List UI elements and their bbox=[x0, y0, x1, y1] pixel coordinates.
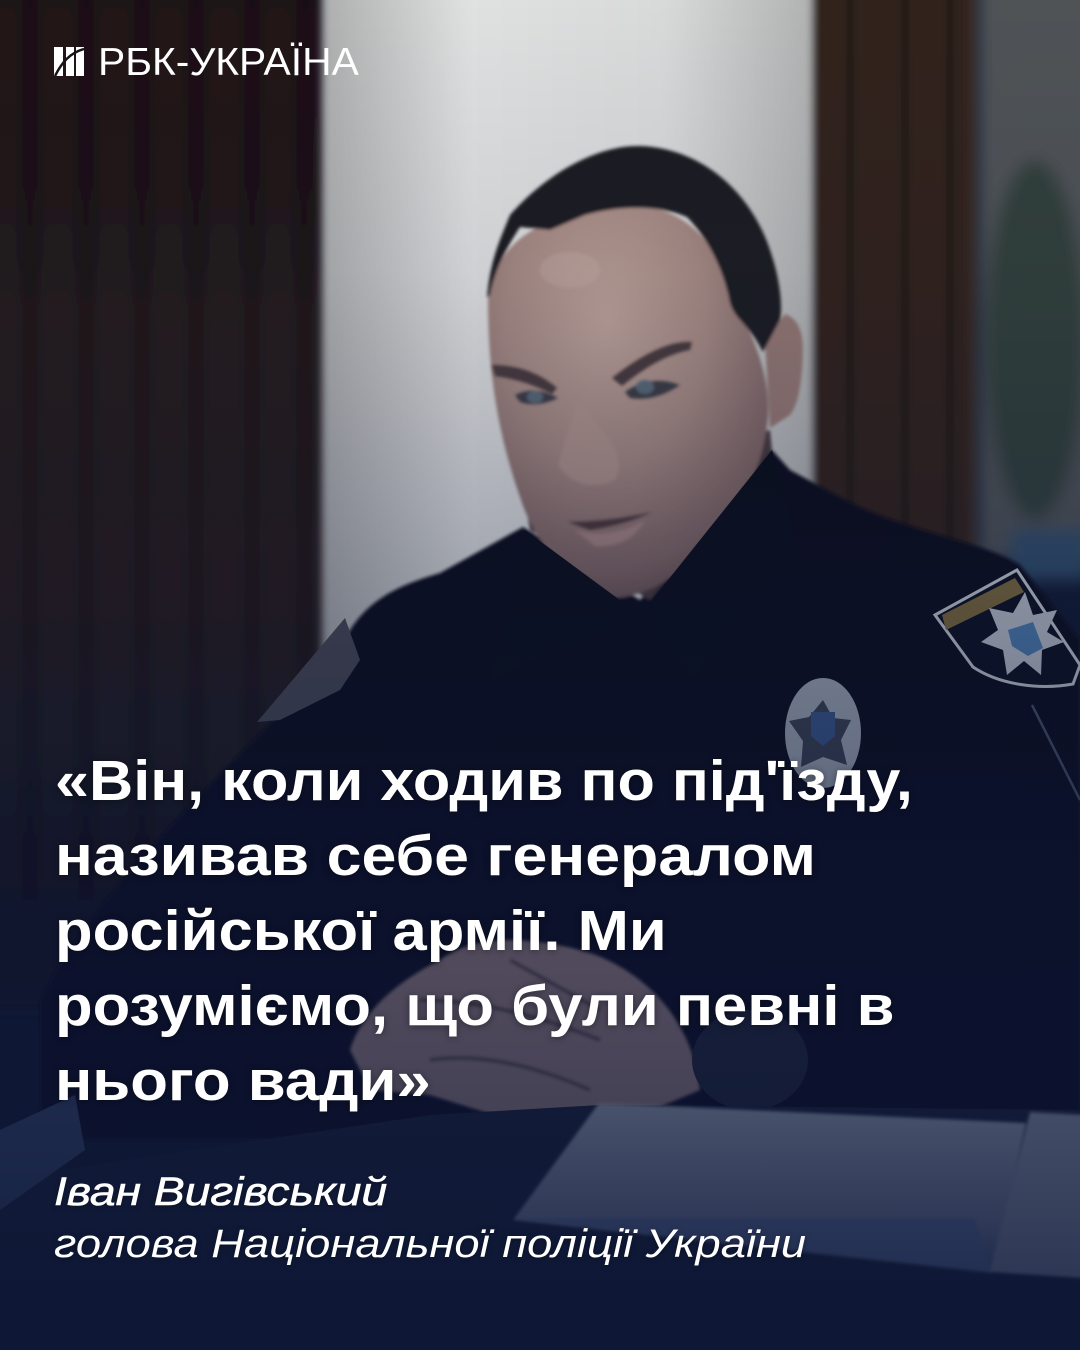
papers bbox=[513, 1103, 1080, 1278]
ear bbox=[765, 314, 803, 428]
neck shadow bbox=[525, 430, 772, 600]
quote text: «Він, коли ходив по під'їзду, bbox=[55, 749, 913, 812]
quote text: розуміємо, що були певні в bbox=[55, 974, 894, 1037]
quote text: називав себе генералом bbox=[55, 824, 816, 887]
quote text: російської армії. Ми bbox=[55, 899, 667, 962]
attribution bbox=[54, 1170, 806, 1266]
face bbox=[488, 204, 768, 598]
facial features bbox=[492, 252, 692, 546]
quote text bbox=[55, 749, 913, 1112]
shoulder patch right: Поліція bbox=[935, 570, 1080, 686]
icon: logo mark bbox=[54, 47, 84, 76]
wrist watch bbox=[692, 1010, 808, 1110]
logo: РБК-Україна bbox=[54, 41, 359, 84]
quote text: нього вади» bbox=[55, 1049, 431, 1112]
uniform bbox=[40, 146, 1080, 1140]
sleeve seam bbox=[1032, 705, 1080, 800]
table bbox=[0, 1105, 1080, 1350]
shoulder patch left bbox=[257, 618, 360, 722]
logo wordmark: РБК-УКРАЇНА bbox=[98, 41, 359, 84]
hair bbox=[487, 146, 781, 352]
attribution: голова Національної поліції України bbox=[54, 1222, 806, 1266]
hands bbox=[350, 940, 700, 1130]
attribution: Іван Вигівський bbox=[54, 1170, 387, 1214]
collar bbox=[490, 450, 800, 680]
book on the left bbox=[0, 1095, 85, 1210]
chest badge bbox=[785, 678, 861, 788]
